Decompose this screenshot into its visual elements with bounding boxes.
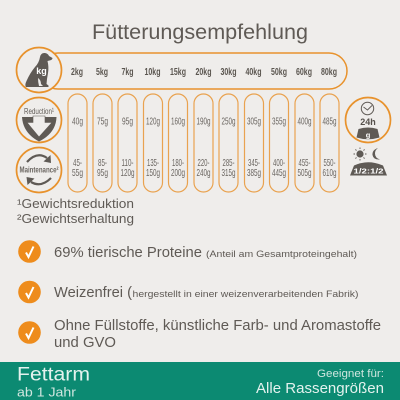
panel: reduction amounts: 485g [322, 116, 337, 128]
panel: weight row: 30kg [220, 66, 236, 78]
text: wheat free: hergestellt in einer weizenverarbeitenden Fabrik) [132, 289, 358, 300]
panel: reduction amounts: 285- [222, 157, 235, 169]
panel: weight row [40, 53, 347, 89]
panel: weight row: 20kg [196, 66, 212, 78]
panel: footer band [0, 362, 400, 400]
panel: reduction amounts: 400- [273, 157, 285, 169]
icon: maintenance: Maintenance² [20, 166, 59, 174]
panel: reduction amounts: 45- [73, 157, 82, 169]
panel: footer band: Alle Rassengrößen [256, 380, 384, 397]
icon: dog with kg [16, 48, 62, 92]
icon: dog with kg: kg [36, 66, 47, 76]
panel: reduction amounts: 345- [248, 157, 260, 169]
text: no fillers: Ohne Füllstoffe, künstliche Farb- und Aromastoffe [54, 317, 381, 334]
icon: check 1 [18, 240, 41, 263]
panel: reduction amounts: 385g [247, 167, 261, 179]
text: wheat free: Weizenfrei ( [54, 284, 132, 301]
icon: maintenance [16, 148, 62, 192]
text: animal proteins: 69% tierische Proteine [54, 244, 202, 261]
footnotes [17, 196, 134, 226]
panel: reduction amounts: 250g [222, 116, 236, 128]
icon: reduction [16, 98, 62, 142]
text: no fillers: und GVO [54, 334, 116, 351]
panel: reduction amounts: 305g [247, 116, 261, 128]
panel: weight row: 2kg [71, 66, 83, 78]
panel: weight row: 10kg [144, 66, 160, 78]
text: animal proteins: (Anteil am Gesamtproteingehalt) [206, 249, 357, 260]
footnotes: ²Gewichtserhaltung [17, 211, 134, 226]
text: animal proteins [54, 244, 357, 261]
panel: reduction amounts: 95g [97, 167, 108, 179]
icon: check 3 [18, 321, 41, 344]
footnotes: ¹Gewichtsreduktion [17, 196, 134, 211]
title: Fütterungsempfehlung [92, 21, 308, 44]
panel: reduction amounts: 315g [222, 167, 236, 179]
panel: reduction amounts: 110- [122, 157, 134, 169]
icon: 24h clock and bowl: g [366, 130, 371, 140]
panel: reduction amounts: 55g [72, 167, 83, 179]
panel: reduction amounts: 445g [272, 167, 286, 179]
panel: reduction amounts: 240g [196, 167, 211, 179]
icon: check 2 [18, 281, 41, 303]
panel: reduction amounts: 135- [147, 157, 159, 169]
panel: weight row: 50kg [271, 66, 287, 78]
panel: reduction amounts: 120g [120, 167, 135, 179]
panel: footer band: ab 1 Jahr [17, 384, 77, 400]
panel: weight row: 15kg [170, 66, 186, 78]
panel: reduction amounts: 160g [171, 116, 185, 128]
panel: reduction amounts: 190g [196, 116, 211, 128]
panel: reduction amounts [68, 94, 339, 192]
panel: reduction amounts: 610g [322, 167, 337, 179]
panel: reduction amounts: 85- [98, 157, 107, 169]
panel: reduction amounts: 40g [72, 116, 83, 128]
panel: reduction amounts: 220- [198, 157, 210, 169]
icon: 24h clock and bowl [346, 98, 390, 142]
panel: weight row: 80kg [321, 66, 337, 78]
panel: reduction amounts: 550- [324, 157, 336, 169]
panel: reduction amounts: 120g [146, 116, 160, 128]
panel: reduction amounts: 180- [172, 157, 184, 169]
panel: reduction amounts: 355g [272, 116, 286, 128]
icon: reduction: Reduction¹ [24, 106, 54, 116]
panel: reduction amounts: 505g [298, 167, 312, 179]
icon: 24h clock and bowl: 24h [360, 117, 376, 127]
panel: reduction amounts: 75g [97, 116, 108, 128]
text: no fillers [54, 317, 381, 351]
panel: reduction amounts: 200g [171, 167, 185, 179]
panel: weight row: 60kg [296, 66, 312, 78]
text: wheat free [54, 284, 358, 301]
icon: sun and moon half portions: 1/2:1/2 [354, 168, 384, 176]
panel: weight row: 7kg [122, 66, 134, 78]
panel: weight row: 5kg [96, 66, 108, 78]
icon: sun and moon half portions [350, 148, 387, 176]
panel: footer band: Fettarm [17, 364, 90, 386]
panel: reduction amounts: 95g [122, 116, 133, 128]
panel: reduction amounts: 150g [146, 167, 160, 179]
panel: reduction amounts: 400g [298, 116, 312, 128]
panel: footer band: Geeignet für: [317, 368, 384, 380]
panel: weight row: 40kg [246, 66, 262, 78]
panel: reduction amounts: 455- [298, 157, 311, 169]
